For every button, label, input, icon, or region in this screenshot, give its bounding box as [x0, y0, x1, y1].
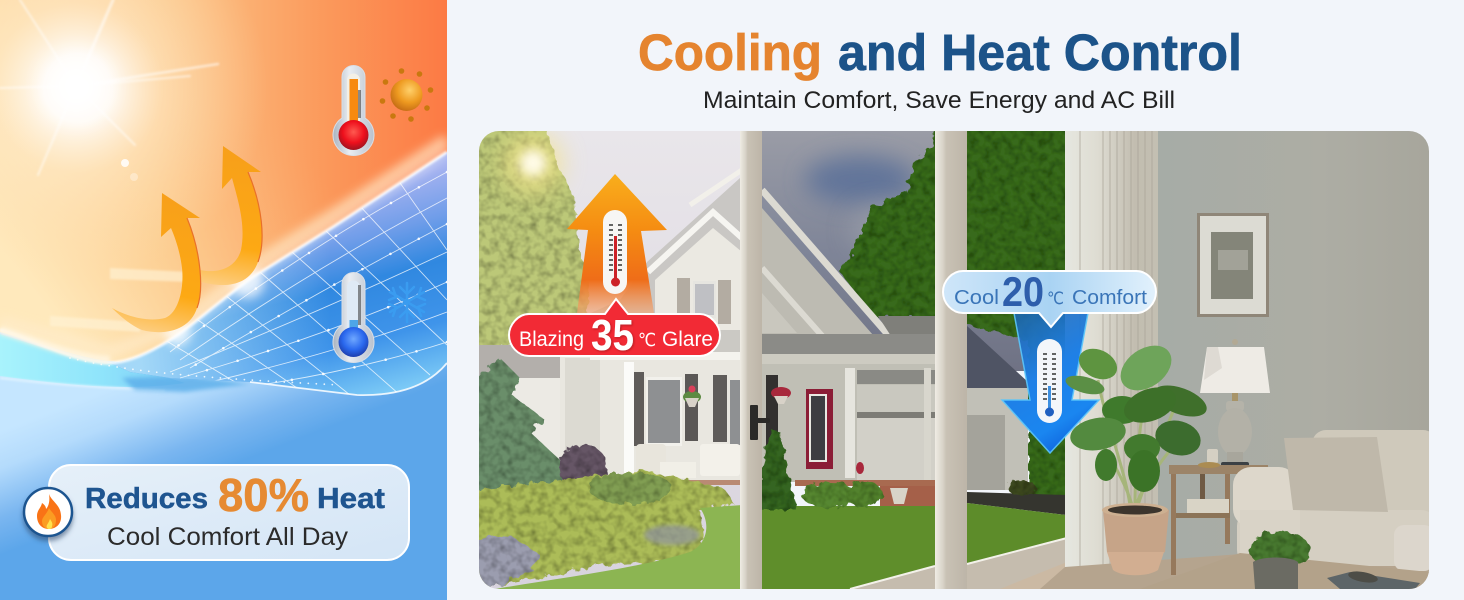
icon: snowflake [389, 283, 425, 322]
label: cool 20 degrees comfort: Comfort [1072, 287, 1147, 309]
lavender [479, 534, 540, 587]
arrow: heat reflecting up, rear [198, 146, 262, 285]
warm glow above film edge [0, 140, 447, 352]
curtain [1065, 131, 1158, 567]
thermometer: hot arrow [603, 210, 627, 294]
dark tree [840, 125, 1075, 500]
label: cool 20 degrees comfort: ℃ [1047, 289, 1064, 308]
outdoor scene: unfiltered bright side [470, 125, 742, 590]
callout headline: Heat [317, 483, 385, 515]
arrow: cooled down [1002, 313, 1099, 453]
floor [1040, 540, 1429, 589]
panel: sun heat versus film illustration [0, 0, 447, 600]
table lamp [1200, 339, 1270, 471]
title [638, 24, 1242, 81]
door frame: left [740, 131, 770, 589]
shaded shrubs [760, 430, 1036, 510]
label: blazing 35 degrees glare: Glare [662, 328, 713, 351]
thermometer: hot [333, 66, 374, 155]
label: cool 20 degrees comfort: Cool [954, 287, 999, 309]
label: cool 20 degrees comfort: 20 [1002, 268, 1044, 315]
side table [1169, 449, 1268, 575]
title: and Heat Control [838, 24, 1242, 81]
plant pot [1103, 510, 1169, 555]
interior wall [1158, 131, 1429, 589]
door handle [750, 405, 770, 440]
thermometer: cool arrow [1037, 339, 1062, 423]
shaded lawn [760, 506, 936, 589]
callout headline: Reduces [85, 483, 208, 515]
icon: sun ball [380, 68, 433, 122]
door frame: centre [935, 131, 967, 589]
sofa [1233, 430, 1437, 571]
bright tree [479, 131, 590, 345]
shaded wave dip [122, 376, 250, 392]
subtitle: Maintain Comfort, Save Energy and AC Bill [703, 87, 1175, 114]
thermometer: cold [333, 272, 374, 362]
warm sky background [0, 0, 447, 362]
sun flare [0, 0, 218, 181]
film upper glowing edge [170, 152, 447, 340]
label: blazing 35 degrees glare: 35 [591, 311, 634, 360]
callout background [49, 465, 409, 560]
title: Cooling [638, 24, 822, 81]
framed picture [1197, 213, 1269, 317]
bright house [479, 170, 742, 484]
cooling film with grid [0, 140, 447, 400]
book and stone [1327, 569, 1420, 589]
callout subtext: Cool Comfort All Day [107, 523, 349, 551]
potted plant [1064, 336, 1211, 575]
purple bush [558, 444, 608, 480]
bottom blue background [0, 332, 447, 600]
callout headline [86, 478, 385, 512]
porch furniture [636, 444, 742, 485]
arrow: heat reflecting up, front [112, 193, 201, 332]
small plant [1250, 531, 1310, 589]
spruce tree [479, 358, 562, 492]
callout: reduces 80% heat [24, 465, 409, 560]
shaded driveway [967, 492, 1066, 515]
label: blazing 35 degrees glare: ℃ [638, 330, 656, 350]
coffee table [1140, 553, 1429, 589]
label: blazing 35 degrees glare: Blazing [519, 328, 584, 351]
arrow: hot glare up [567, 174, 667, 313]
window sill [850, 538, 1067, 589]
label: cool 20 degrees comfort [943, 268, 1156, 327]
outdoor scene: film shaded side [760, 125, 1075, 589]
icon: flame badge [24, 488, 72, 536]
panel: house seen through window, with and without film [470, 125, 1437, 590]
heat streaks [50, 268, 190, 332]
bright shrubs [470, 470, 735, 590]
film lower dotted edge [70, 358, 340, 385]
sun in photo [503, 133, 563, 193]
shaded house [762, 190, 1028, 506]
cyan wave [0, 334, 185, 387]
pillow [1284, 437, 1388, 512]
bright lawn [495, 505, 742, 589]
floor [1000, 562, 1067, 589]
callout headline: 80% [218, 469, 309, 521]
label: blazing 35 degrees glare [509, 299, 720, 360]
